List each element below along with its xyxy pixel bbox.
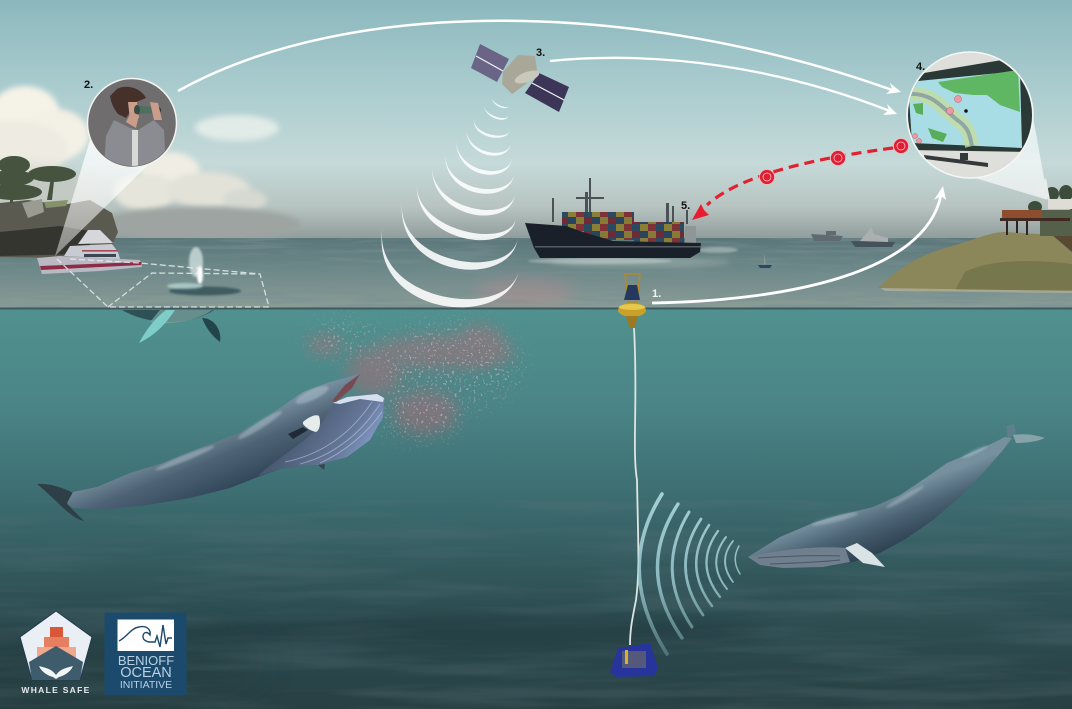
step label 3: 3. [536, 47, 545, 59]
step label 4: 4. [916, 61, 925, 73]
throat pouch [258, 394, 384, 476]
humpback whale at the surface [122, 247, 241, 343]
speckled particles [309, 320, 525, 440]
underwater background [0, 308, 1072, 709]
logo wordmark: BENIOFF [118, 653, 174, 668]
dorsal mottling [154, 383, 330, 473]
feeding blue whale [37, 374, 384, 521]
step label 2: 2. [84, 79, 93, 91]
logo wordmark: INITIATIVE [120, 679, 172, 691]
forearms [126, 102, 162, 128]
monitor inset circle [905, 52, 1034, 178]
tail fluke [37, 484, 84, 521]
hydrophone sonar arcs [639, 494, 740, 654]
lower jaw [748, 547, 850, 568]
white arrow: buoy to shore station [652, 186, 946, 303]
container ship [525, 178, 738, 264]
sailboat [758, 253, 772, 268]
pointer cone: monitor to dish [975, 117, 1048, 200]
hill [878, 232, 1072, 292]
pointer cone: observer to boat [55, 140, 148, 256]
tv stand [924, 153, 988, 167]
distant naval ship [851, 227, 895, 247]
trees [1028, 185, 1072, 213]
step label 5: 5. [681, 200, 690, 212]
seafloor acoustic lander [610, 643, 658, 677]
satellite signal arcs [381, 98, 519, 307]
logo wordmark: WHALE SAFE [21, 685, 91, 695]
left solar panel [471, 44, 509, 82]
map land [938, 70, 1020, 112]
shipping lane [908, 94, 972, 146]
body [748, 437, 1012, 568]
whale watching boat [37, 230, 142, 274]
dorsal mottling [811, 444, 989, 528]
pouch rim and mouth [333, 394, 384, 404]
observer inset circle [88, 78, 176, 168]
left rocky island [0, 156, 118, 258]
tail fluke [1006, 424, 1045, 443]
pink plankton cloud [307, 320, 525, 440]
hull [525, 223, 701, 258]
logo: Benioff Ocean Initiative [104, 612, 186, 695]
buoy [618, 274, 646, 327]
red dashed route to ship [692, 138, 908, 220]
right solar panel [525, 73, 569, 112]
dashed observation zone [57, 259, 269, 307]
sea surface [0, 238, 1072, 309]
white arrow: satellite to shore station [550, 58, 897, 115]
observer jacket [104, 120, 166, 168]
logo wordmark [118, 653, 174, 691]
pectoral fin [845, 543, 885, 567]
whale back and spout [167, 247, 241, 296]
white arrow: observer to shore station [178, 21, 901, 94]
observer hair and face [110, 87, 146, 118]
hill with shore station [878, 185, 1072, 293]
map whale markers [912, 96, 962, 144]
mooring cable [630, 328, 638, 645]
superstructure [685, 226, 696, 244]
body [67, 374, 360, 510]
logo wordmark: OCEAN [120, 665, 172, 681]
arrowhead [692, 204, 709, 220]
sky background [0, 0, 1072, 241]
target icons [760, 138, 908, 184]
satellite body [502, 55, 541, 94]
containers [562, 212, 634, 240]
bridge masts [552, 178, 688, 224]
wake [528, 247, 738, 264]
singing blue whale [748, 424, 1045, 568]
pectoral fin [303, 415, 320, 432]
small ventral fin [318, 464, 325, 470]
tv frame [905, 60, 1034, 152]
clouds [0, 86, 300, 241]
distant ship [811, 231, 843, 241]
underwater body [122, 310, 220, 343]
throat grooves [285, 402, 382, 464]
house [1000, 199, 1072, 236]
map water [908, 71, 1022, 148]
throat grooves [758, 556, 840, 564]
step label 1: 1. [652, 288, 661, 300]
binoculars [134, 105, 161, 115]
islands [913, 103, 947, 142]
logo: Whale Safe [20, 611, 92, 695]
satellite [471, 44, 569, 112]
wave and seismograph icon [119, 625, 172, 647]
satellite dish [1032, 178, 1050, 200]
trees [0, 156, 76, 203]
